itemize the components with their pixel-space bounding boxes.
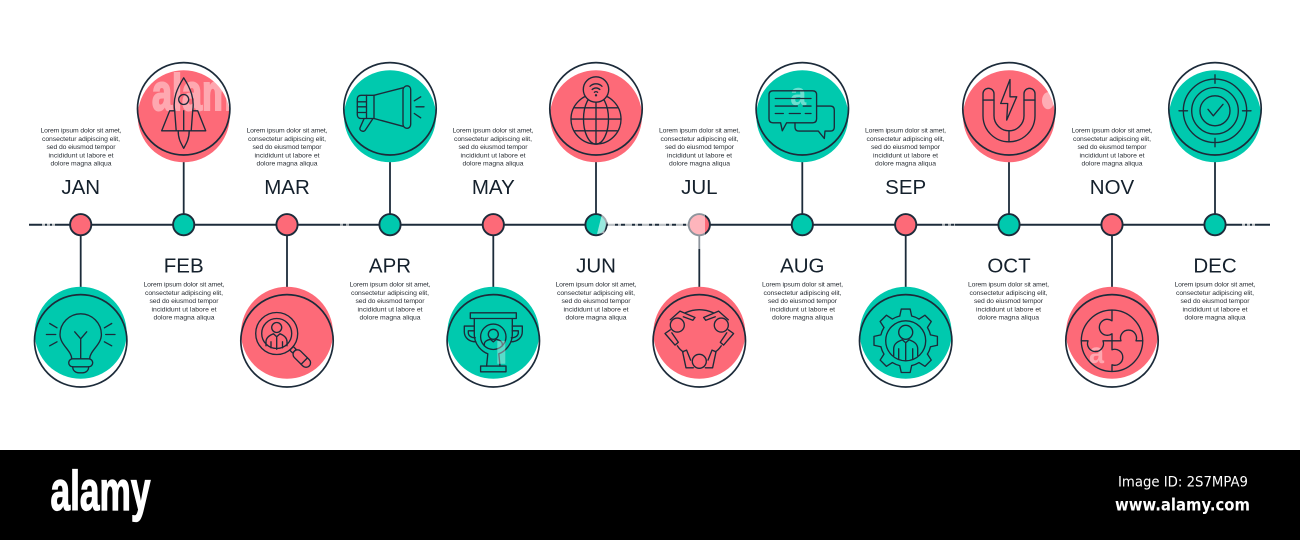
watermark dashes on axis (42, 223, 1255, 226)
website: www.alamy.com (1115, 496, 1250, 515)
description: AUG (762, 282, 843, 322)
icon circle: JUN (550, 63, 642, 162)
panel: JUN (550, 63, 642, 322)
stem: JUN (595, 155, 597, 225)
footer bar (0, 450, 1300, 540)
panel: JUL (653, 128, 746, 387)
description: JAN: sed do eiusmod tempor (46, 144, 116, 151)
description: FEB: consectetur adipiscing elit, (145, 290, 223, 297)
description: JUN: dolore magna aliqua (566, 315, 627, 322)
icon: light bulb (46, 314, 115, 373)
month label: JUL: JUL (681, 176, 718, 199)
description: NOV: incididunt ut labore et (1080, 152, 1145, 159)
node: JUN (585, 214, 607, 235)
description: NOV: sed do eiusmod tempor (1078, 144, 1147, 151)
description: SEP (865, 128, 946, 168)
icon: puzzle (1081, 310, 1143, 372)
description: MAY: dolore magna aliqua (462, 161, 524, 168)
icon: target with check (1179, 75, 1251, 147)
node: FEB (173, 214, 194, 235)
icon: magnet with lightning (983, 80, 1035, 142)
stem: FEB (183, 155, 185, 225)
description: JUL: Lorem ipsum dolor sit amet, (659, 128, 740, 135)
description: JUN: incididunt ut labore et (564, 306, 629, 313)
description: NOV: dolore magna aliqua (1082, 161, 1143, 168)
description: JAN (40, 128, 122, 168)
description: SEP: dolore magna aliqua (875, 161, 936, 168)
icon circle: MAR (241, 287, 333, 387)
node: OCT (998, 214, 1020, 235)
description: AUG: sed do eiusmod tempor (768, 298, 838, 305)
description: OCT: sed do eiusmod tempor (974, 298, 1044, 305)
icon: megaphone (357, 86, 424, 131)
description: NOV: consectetur adipiscing elit, (1073, 136, 1151, 143)
description: AUG: Lorem ipsum dolor sit amet, (762, 282, 843, 289)
panel: OCT (963, 63, 1055, 322)
panel: DEC (1169, 63, 1261, 322)
description: OCT: incididunt ut labore et (976, 306, 1041, 313)
description: OCT: consectetur adipiscing elit, (970, 290, 1048, 297)
node: JUL (689, 214, 710, 235)
month label: DEC: DEC (1193, 255, 1237, 278)
stem: MAR (286, 225, 288, 294)
icon: chat bubbles (769, 91, 834, 138)
description: JUL: incididunt ut labore et (667, 152, 732, 159)
icon circle: SEP (860, 287, 952, 387)
description: NOV (1072, 128, 1153, 168)
description: JUL (659, 128, 740, 168)
description: MAR: consectetur adipiscing elit, (248, 136, 326, 143)
description: MAR (246, 128, 328, 168)
stem: NOV (1111, 225, 1113, 294)
stem: JAN (80, 225, 82, 294)
description: MAR: Lorem ipsum dolor sit amet, (246, 128, 328, 135)
description: JUN (556, 282, 637, 322)
month label: JAN: JAN (61, 176, 100, 199)
panel: APR (344, 63, 436, 322)
image id: Image ID: 2S7MPA9 (1118, 475, 1248, 491)
node: APR (379, 214, 401, 235)
description: AUG: consectetur adipiscing elit, (764, 290, 842, 297)
month label: OCT: OCT (987, 255, 1031, 278)
icon: globe with wifi (571, 77, 621, 144)
node: SEP (895, 214, 916, 235)
icon circle: MAY (447, 287, 540, 387)
month label: FEB: FEB (164, 255, 204, 278)
description: FEB: dolore magna aliqua (154, 315, 215, 322)
icon circle: NOV (1066, 287, 1158, 387)
watermark fragment on node (597, 214, 608, 234)
panel: FEB (138, 63, 234, 322)
panel: JAN (34, 128, 127, 387)
node: JAN (70, 214, 91, 235)
description: SEP: consectetur adipiscing elit, (866, 136, 945, 143)
node: NOV (1101, 214, 1123, 235)
description: DEC: incididunt ut labore et (1182, 306, 1248, 313)
watermark fragment: a (790, 76, 806, 112)
description: JAN: Lorem ipsum dolor sit amet, (40, 128, 122, 135)
description: SEP: incididunt ut labore et (873, 152, 938, 159)
description: AUG: dolore magna aliqua (772, 315, 833, 322)
watermark fragment: a (1089, 337, 1104, 370)
stem: SEP (905, 225, 907, 294)
stem: OCT (1008, 155, 1010, 225)
watermark fragment (497, 341, 505, 364)
description: APR (350, 282, 431, 322)
icon circle: OCT (963, 63, 1055, 162)
description: JUL: sed do eiusmod tempor (665, 144, 735, 151)
description: JUL: dolore magna aliqua (669, 161, 730, 168)
panel: SEP (860, 128, 952, 387)
month label: MAY: MAY (472, 176, 515, 199)
description: OCT (968, 282, 1049, 322)
stem: DEC (1214, 155, 1216, 225)
icon circle: JUL (653, 287, 746, 387)
description: DEC: dolore magna aliqua (1184, 315, 1246, 322)
description: DEC (1174, 282, 1256, 322)
stem: JUL (698, 225, 700, 294)
month label: JUN: JUN (576, 255, 616, 278)
panel: MAY (447, 128, 540, 387)
month label: MAR: MAR (264, 176, 310, 199)
description: FEB: incididunt ut labore et (152, 306, 217, 313)
description: APR: Lorem ipsum dolor sit amet, (350, 282, 431, 289)
description: OCT: Lorem ipsum dolor sit amet, (968, 282, 1049, 289)
description: DEC: Lorem ipsum dolor sit amet, (1174, 282, 1256, 289)
description: APR: dolore magna aliqua (360, 315, 421, 322)
description: DEC: sed do eiusmod tempor (1180, 298, 1250, 305)
description: MAY: incididunt ut labore et (460, 152, 526, 159)
description: APR: incididunt ut labore et (358, 306, 423, 313)
footer logo: alamy (50, 459, 150, 522)
icon circle: FEB (138, 63, 234, 162)
description: FEB: Lorem ipsum dolor sit amet, (144, 282, 225, 289)
description: OCT: dolore magna aliqua (978, 315, 1039, 322)
icon: trophy with person (464, 313, 522, 372)
panel: AUG (756, 63, 848, 322)
watermark fragment on node and stem (688, 213, 705, 249)
description: MAY (452, 128, 534, 168)
watermark fragment (1042, 92, 1054, 109)
timeline axis (29, 224, 1270, 226)
description: MAR: incididunt ut labore et (254, 152, 320, 159)
month label: APR: APR (369, 255, 411, 278)
node: MAR (276, 214, 298, 235)
description: JUN: consectetur adipiscing elit, (557, 290, 635, 297)
stem: MAY (492, 225, 494, 294)
description: JAN: dolore magna aliqua (50, 161, 112, 168)
description: APR: sed do eiusmod tempor (356, 298, 425, 305)
panel: MAR (241, 128, 333, 387)
description: DEC: consectetur adipiscing elit, (1176, 290, 1254, 297)
month label: NOV: NOV (1090, 176, 1135, 199)
icon circle: JAN (34, 287, 127, 387)
panel: NOV (1066, 128, 1158, 387)
description: JUN: Lorem ipsum dolor sit amet, (556, 282, 637, 289)
description: AUG: incididunt ut labore et (770, 306, 835, 313)
description: MAR: sed do eiusmod tempor (252, 144, 322, 151)
node: AUG (792, 214, 813, 235)
icon circle: APR (344, 63, 436, 162)
icon: rocket (162, 78, 206, 148)
description: JAN: consectetur adipiscing elit, (42, 136, 120, 143)
month label: SEP: SEP (885, 176, 926, 199)
description: APR: consectetur adipiscing elit, (351, 290, 429, 297)
description: SEP: sed do eiusmod tempor (871, 144, 941, 151)
month label: AUG: AUG (780, 255, 825, 278)
description: MAY: sed do eiusmod tempor (458, 144, 528, 151)
description: FEB (144, 282, 225, 322)
description: FEB: sed do eiusmod tempor (150, 298, 219, 305)
icon: team around a table (665, 310, 734, 368)
node: MAY (483, 214, 504, 235)
description: JAN: incididunt ut labore et (48, 152, 114, 159)
node: DEC (1204, 214, 1226, 235)
stem: APR (389, 155, 391, 225)
icon circle: DEC (1169, 63, 1261, 162)
description: NOV: Lorem ipsum dolor sit amet, (1072, 128, 1153, 135)
icon: gear with person (874, 309, 938, 373)
description: JUL: consectetur adipiscing elit, (660, 136, 739, 143)
icon circle: AUG (756, 63, 848, 162)
stem: AUG (801, 155, 803, 225)
description: MAR: dolore magna aliqua (256, 161, 318, 168)
description: MAY: consectetur adipiscing elit, (454, 136, 532, 143)
watermark: alamy: alam (152, 64, 234, 121)
description: JUN: sed do eiusmod tempor (562, 298, 631, 305)
icon: magnifier with person (256, 312, 312, 369)
description: MAY: Lorem ipsum dolor sit amet, (452, 128, 534, 135)
description: SEP: Lorem ipsum dolor sit amet, (865, 128, 946, 135)
